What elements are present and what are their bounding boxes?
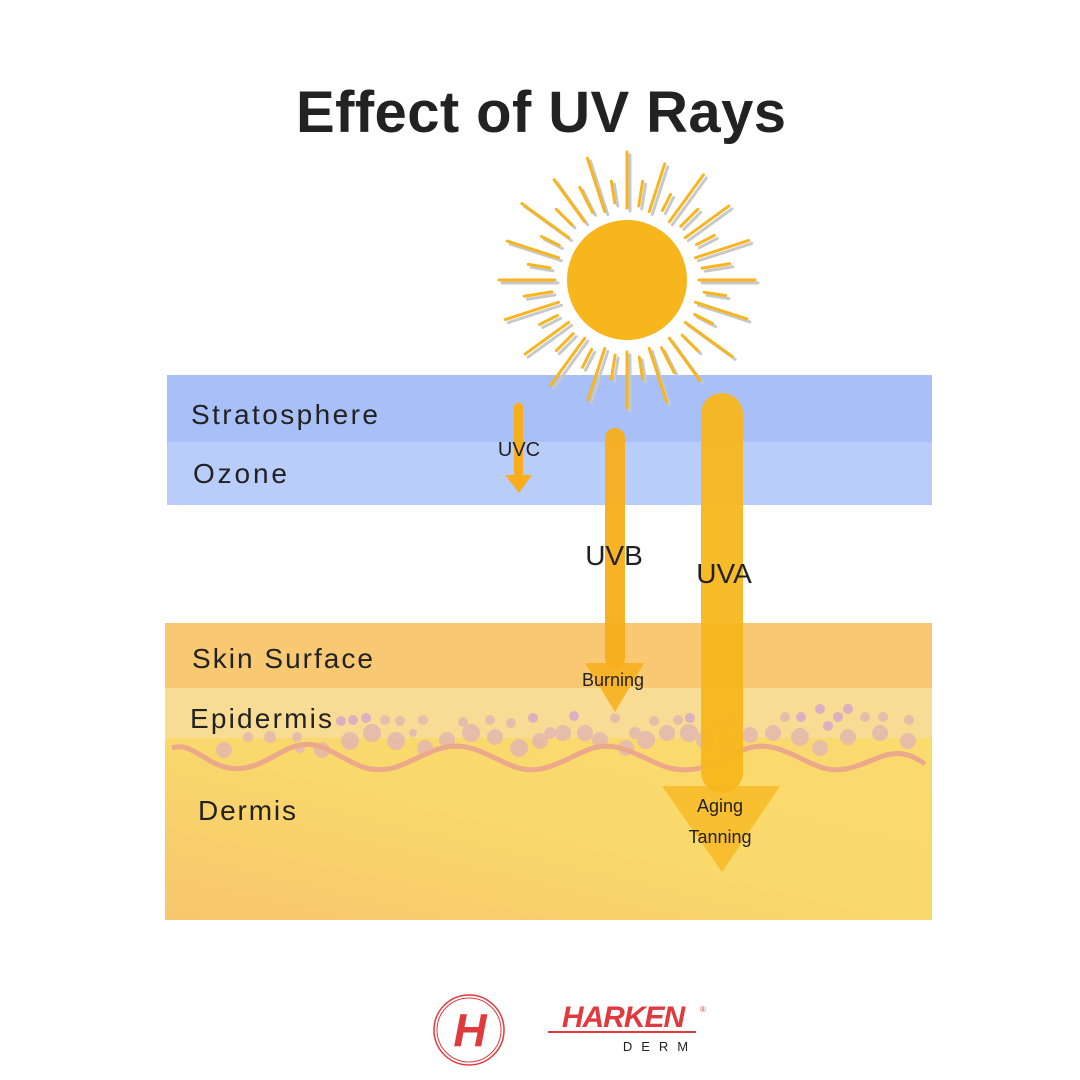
logo: HARKEN DERM (548, 1001, 706, 1054)
label: epidermis: Epidermis (190, 703, 332, 734)
arrow: UVC: UVC (498, 439, 540, 461)
arrow: UVB: Burning (582, 670, 644, 690)
arrow: UVC (498, 403, 540, 493)
cells (216, 712, 916, 758)
label: stratosphere: Stratosphere (191, 399, 378, 430)
arrow: UVA: Aging (697, 796, 743, 816)
logo: HARKEN DERM: DERM (623, 1039, 697, 1054)
arrow: UVA (662, 393, 780, 872)
arrow: UVB: UVB (585, 540, 643, 571)
label: ozone: Ozone (193, 458, 287, 489)
logo: H emblem (434, 995, 504, 1065)
panel: skin layers (165, 623, 932, 920)
arrow: UVB (582, 428, 644, 712)
panel: atmosphere layers (167, 375, 932, 505)
icon: sun (499, 152, 758, 411)
arrow: UVA: UVA (696, 558, 752, 589)
wavy line (172, 744, 925, 770)
arrow: UVA: Tanning (688, 827, 752, 847)
label: dermis: Dermis (198, 795, 296, 826)
logo: H emblem: H (453, 1004, 487, 1056)
title: Effect of UV Rays (296, 80, 786, 145)
logo: HARKEN DERM: ® (700, 1005, 706, 1014)
logo: HARKEN DERM: HARKEN (562, 1001, 686, 1034)
label: skin surface: Skin Surface (192, 643, 373, 674)
